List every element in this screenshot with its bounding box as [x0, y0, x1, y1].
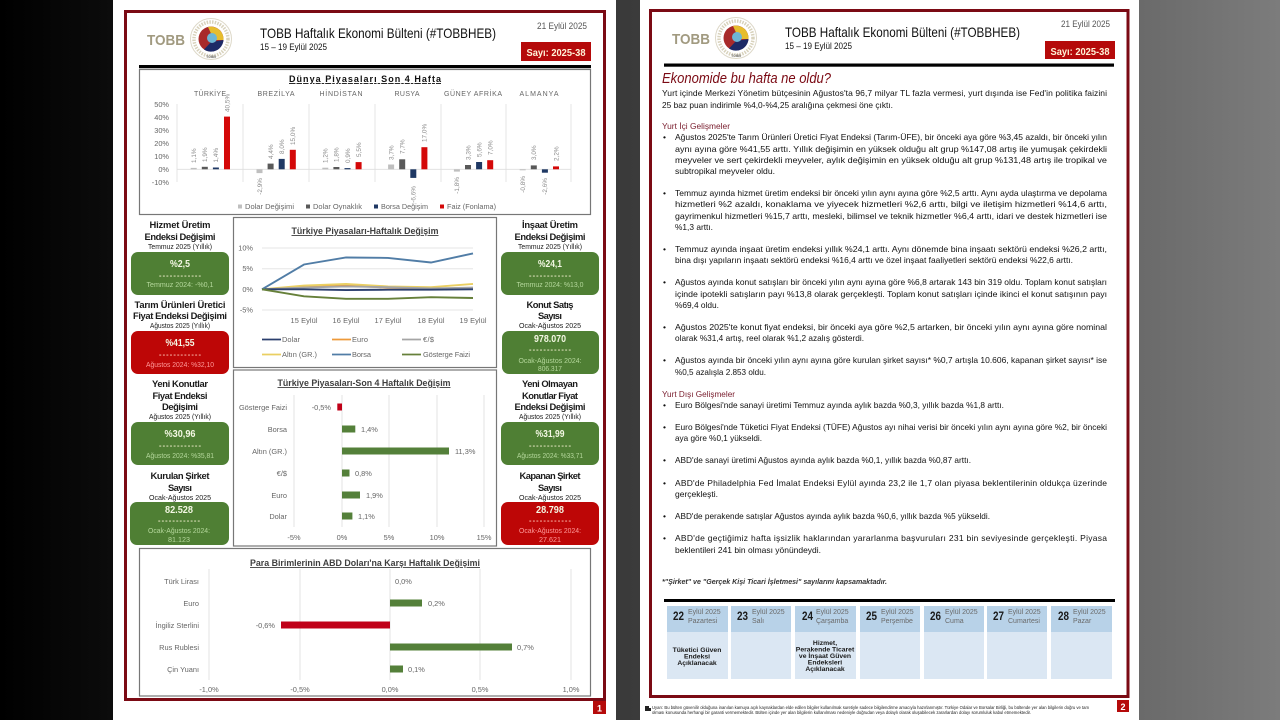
KPI: agricultural producer price: ------------ — [159, 350, 202, 359]
country labels — [194, 89, 559, 98]
KPI: construction production: %24,1 — [538, 258, 562, 270]
KPI: agricultural producer price: Ağustos 2025 (Yıllık) — [150, 321, 210, 330]
y axis: 40% — [154, 113, 169, 122]
KPI: construction production: Endeksi Değişimi — [514, 231, 586, 242]
bullet: housing sales — [663, 277, 1107, 310]
bar value labels: 3,7% — [388, 145, 395, 160]
KPI: existing home prices: Konutlar Fiyat — [522, 390, 578, 401]
legend: Gösterge Faizi — [423, 350, 470, 359]
axis and grid: 5% — [242, 264, 253, 273]
calendar day 28 — [1051, 606, 1112, 679]
x axis: 15% — [477, 533, 492, 542]
bullet: Philadelphia Fed: gerçekleşti. — [675, 489, 718, 499]
value labels: 0,1% — [408, 665, 425, 674]
row labels: Euro — [183, 599, 199, 608]
bullet: US retail: • — [663, 511, 666, 521]
calendar day 23: Eylül 2025 — [752, 609, 785, 616]
calendar day 24: Endeksleri — [808, 660, 842, 666]
bar value labels: 15,0% — [290, 127, 297, 145]
calendar day 26: Eylül 2025 — [945, 609, 978, 616]
calendar day 27: 27 — [993, 611, 1004, 623]
value labels: 0,7% — [517, 643, 534, 652]
heading: Dünya Piyasaları Son 4 Hafta — [289, 74, 442, 84]
TOBB wordmark: TOBB — [672, 31, 710, 48]
KPI: existing home prices: Ağustos 2025 (Yıllık) — [519, 412, 581, 421]
x axis: 10% — [430, 533, 445, 542]
bar value labels: 8,0% — [279, 139, 286, 154]
disclaimer: olması konusunda herhangi bir garanti vermemektedir. Bülten içinde yer alan bilgilerin kullanılması nedeniyle doğrudan veya dolaylı olarak oluşabilecek zararlardan dolayı sorumluluk kabul etmemektedir. — [652, 710, 1031, 715]
bullet: services: %1,3 arttı. — [675, 222, 713, 232]
page number 1: 1 — [597, 704, 602, 714]
KPI: service production — [131, 219, 229, 295]
intro text — [662, 88, 1107, 110]
bullet: Tarım-ÜFE — [663, 132, 1107, 176]
bullet: construction — [663, 244, 1107, 265]
bullet: Philadelphia Fed: ABD'de Philadelphia Fed İmalat Endeksi Eylül ayında 23,2 ile 1,7 olan piyasa beklentilerinin oldukça üzerinde — [675, 478, 1107, 488]
bullet: euro area CPI — [663, 422, 1107, 443]
bullet: US industry: • — [663, 455, 666, 465]
bar value labels: 1,2% — [323, 148, 330, 163]
bullet: services: hizmetleri %2 azaldı, konaklama ve yiyecek hizmetleri %2,6 arttı, bilgi ve iletişim hizmetleri %14,6 arttı, — [675, 199, 1107, 209]
subheading: Yurt Dışı Gelişmeler — [662, 389, 735, 399]
calendar day 24: Hizmet, — [813, 640, 837, 647]
panel: world markets — [140, 70, 590, 214]
calendar day 22 — [667, 606, 728, 679]
legend: Dolar Değişimi — [245, 202, 294, 211]
KPI: agricultural producer price: Tarım Ürünleri Üretici — [134, 299, 226, 310]
value labels: 0,0% — [395, 577, 412, 586]
page number 2 — [1117, 700, 1129, 712]
axis and grid — [238, 244, 487, 325]
bars — [337, 404, 449, 520]
page 1 red frame — [126, 12, 604, 700]
KPI: existing home prices: Yeni Olmayan — [522, 378, 578, 389]
country labels: TÜRKİYE — [194, 89, 226, 98]
axis and grid: 15 Eylül — [290, 316, 318, 325]
calendar day 26: 26 — [930, 611, 941, 623]
bullet: construction: Temmuz ayında inşaat üretim endeksi yıllık %24,1 arttı. Aynı dönemde bina inşaatı sektörü endeksi %26,2 arttı, — [675, 244, 1107, 254]
x axis: 5% — [384, 533, 395, 542]
KPI: service production: Hizmet Üretim — [150, 219, 210, 230]
axis and grid: 0% — [242, 285, 253, 294]
heading: Türkiye Piyasaları-Haftalık Değişim — [292, 226, 438, 236]
icon: TOBB seal: TOBB — [206, 55, 216, 59]
KPI: new home prices: Değişimi — [162, 401, 198, 412]
value labels: 0,2% — [428, 599, 445, 608]
issue badge: Sayı: 2025-38 — [1050, 47, 1110, 58]
KPI: construction production: Temmuz 2024: %13,0 — [516, 280, 584, 289]
row labels: Gösterge Faizi — [239, 403, 287, 412]
KPI: new home prices: Ağustos 2024: %35,81 — [146, 451, 214, 460]
KPI: founded companies — [130, 470, 229, 545]
icon: warning — [645, 706, 651, 711]
page 2 header — [664, 18, 1115, 67]
legend: Altın (GR.) — [282, 350, 317, 359]
calendar day 25: 25 — [866, 611, 878, 623]
legend: Borsa Değişim — [381, 202, 428, 211]
value labels: 1,4% — [361, 425, 378, 434]
value labels: 1,1% — [358, 512, 375, 521]
KPI: service production: Temmuz 2025 (Yıllık) — [148, 242, 212, 251]
calendar day 27 — [987, 606, 1047, 679]
legend: €/$ — [423, 335, 434, 344]
KPI: agricultural producer price: Fiyat Endeksi Değişimi — [133, 310, 227, 321]
axis and grid: 19 Eylül — [460, 316, 487, 325]
legend: Dolar — [282, 335, 301, 344]
calendar day 22: Eylül 2025 — [688, 609, 721, 616]
KPI: housing sales: 978.070 — [534, 333, 566, 345]
row labels — [155, 577, 199, 674]
bullet: US retail: ABD'de perakende satışlar Ağustos ayında aylık bazda %0,6, yıllık bazda %5 yükseldi. — [675, 511, 990, 521]
x axis: 0,0% — [382, 685, 399, 694]
bullet: euro area CPI: • — [663, 422, 666, 432]
bullet: companies: %0,5 azalışla 2.853 oldu. — [675, 367, 766, 377]
row labels: Çin Yuanı — [167, 665, 199, 674]
icon: TOBB seal — [716, 18, 756, 58]
KPI: construction production: ------------ — [529, 271, 572, 280]
icon: TOBB seal: TOBB — [731, 54, 741, 58]
KPI: housing sales: ------------ — [529, 345, 572, 354]
bar value labels: 3,0% — [531, 145, 538, 160]
calendar day 22: Pazartesi — [688, 618, 718, 625]
bullet: housing sales: Ağustos ayında konut satışları bir önceki yılın aynı ayına göre %6,8 artarak 143 bin 319 oldu. Toplam konut satışları — [675, 277, 1107, 287]
calendar day 25: Eylül 2025 — [881, 609, 914, 616]
calendar day 24: Eylül 2025 — [816, 609, 849, 616]
bar value labels: 40,5% — [224, 94, 231, 112]
disclaimer — [645, 705, 1090, 715]
value labels: -0,5% — [312, 403, 331, 412]
KPI: closed companies: Ocak-Ağustos 2024: — [519, 526, 581, 535]
calendar day 23: 23 — [737, 611, 748, 623]
title: TOBB Haftalık Ekonomi Bülteni (#TOBBHEB) — [260, 25, 496, 41]
bullet: US industry: ABD'de sanayi üretimi Ağustos ayında aylık bazda %0,1, yıllık bazda %0,87 arttı. — [675, 455, 971, 465]
axis and grid: 18 Eylül — [418, 316, 445, 325]
x axis — [287, 533, 492, 542]
date range: 15 – 19 Eylül 2025 — [260, 42, 327, 53]
bullet: companies — [663, 355, 1107, 377]
disclaimer: Uyarı: Bu bülten güvenilir olduğuna inanılan kamuya açık kaynaklardan elde edilen bilgiler kullanılmak suretiyle sadece bilgilendirme amacıyla hazırlanmıştır. Türkiye Odalar ve Borsalar Birliği, bu bültende yer alan bilgilerin doğru ve tam — [652, 705, 1090, 710]
intro text: 25 baz puan indirimle %4,0-%4,25 aralığına çekmesi öne çıktı. — [662, 100, 893, 110]
KPI: new home prices: Yeni Konutlar — [152, 378, 208, 389]
calendar day 23 — [731, 606, 791, 679]
KPI: service production: %2,5 — [170, 258, 190, 270]
KPI: closed companies: 28.798 — [536, 504, 564, 516]
bullet: companies: Ağustos ayında bir önceki yılın aynı ayına göre kurulan şirket sayısı* %0,7 artışla 10.606, kapanan şirket sayısı* ise — [675, 355, 1107, 365]
y axis: 0% — [158, 165, 169, 174]
KPI: housing sales: 806.317 — [538, 364, 562, 373]
KPI: founded companies: ------------ — [158, 516, 200, 525]
issue date: 21 Eylül 2025 — [1061, 19, 1110, 29]
row labels: €/$ — [277, 469, 287, 478]
page 1 header — [139, 18, 591, 68]
bullet: services — [663, 188, 1107, 232]
page 1 — [113, 0, 616, 720]
KPI: housing sales — [502, 299, 599, 374]
legend: Faiz (Fonlama) — [447, 202, 496, 211]
calendar day 24: Perakende Ticaret — [796, 646, 855, 654]
KPI: existing home prices — [501, 378, 599, 465]
country labels: RUSYA — [394, 91, 420, 98]
icon: TOBB seal — [190, 18, 232, 60]
panel: currencies against USD — [140, 548, 590, 696]
axis and grid: 16 Eylül — [332, 316, 360, 325]
KPI: housing sales: Ocak-Ağustos 2024: — [518, 356, 582, 365]
axis and grid: 17 Eylül — [374, 316, 402, 325]
calendar day 22: Tüketici Güven — [673, 647, 721, 654]
bar value labels: 1,9% — [202, 147, 209, 162]
value labels: 1,9% — [366, 491, 383, 500]
issue date: 21 Eylül 2025 — [537, 21, 587, 31]
bullet: housing sales: • — [663, 277, 666, 287]
bars — [281, 600, 512, 672]
bullet: US jobless claims: beklentileri 241 bin olması yönündeydi. — [675, 545, 821, 555]
KPI: founded companies: Sayısı — [168, 482, 192, 493]
bar value labels: 7,0% — [488, 140, 494, 155]
KPI: existing home prices: ------------ — [529, 441, 572, 450]
issue badge — [1045, 41, 1115, 59]
axis and grid: 10% — [238, 244, 253, 252]
bar value labels: -6,6% — [411, 186, 418, 203]
y axis: 30% — [154, 126, 169, 135]
legend — [262, 335, 470, 359]
legend: Euro — [352, 335, 368, 344]
calendar day 23: Salı — [752, 618, 764, 625]
KPI: new home prices — [131, 378, 229, 465]
bullet: Tarım-ÜFE: meyveler ve sert çekirdekli meyveler, aylık değişimin en yüksek olduğu alt grup %131,48 artış ile tropikal ve — [675, 155, 1107, 165]
KPI: agricultural producer price — [131, 299, 229, 374]
bar value labels: 4,4% — [268, 144, 275, 159]
page 2 red frame — [650, 10, 1128, 696]
KPI: service production: ------------ — [159, 271, 202, 280]
calendar day 24: Açıklanacak — [805, 666, 845, 673]
KPI: existing home prices: Ağustos 2024: %33,71 — [517, 451, 583, 460]
bar value labels: 1,1% — [191, 148, 198, 163]
x axis — [199, 685, 580, 694]
row labels: Dolar — [269, 512, 288, 521]
bullet: euro area industry: Euro Bölgesi'nde sanayi üretimi Temmuz ayında aylık bazda %0,3, yıllık bazda %1,8 arttı. — [675, 400, 1004, 410]
KPI: founded companies: 81.123 — [168, 535, 190, 544]
KPI: construction production: Temmuz 2025 (Yıllık) — [518, 242, 582, 251]
KPI: new home prices: Fiyat Endeksi — [152, 390, 208, 401]
intro text: Yurt içinde Merkezi Yönetim bütçesinin Ağustos'ta 96,7 milyar TL fazla vermesi, yurt dışında ise Fed'in politika faizini — [662, 88, 1107, 98]
KPI: closed companies: Kapanan Şirket — [520, 470, 580, 481]
KPI: founded companies: Ocak-Ağustos 2025 — [149, 493, 211, 502]
KPI: existing home prices: %31,99 — [536, 428, 565, 440]
KPI: closed companies: ------------ — [529, 516, 572, 525]
calendar day 26: Cuma — [945, 618, 964, 625]
legend: Borsa — [352, 350, 372, 359]
KPI: service production: Endeksi Değişimi — [144, 231, 216, 242]
bullet: Tarım-ÜFE: aynı ayına göre %41,55 arttı. Yıllık değişimin en yüksek olduğu alt grup %147,08 artış ile yumuşak çekirdekli — [675, 144, 1107, 154]
bullet: US jobless claims: • — [663, 533, 666, 543]
row labels: Altın (GR.) — [252, 447, 287, 456]
KPI: agricultural producer price: %41,55 — [166, 337, 195, 349]
value labels: -0,6% — [256, 621, 275, 630]
bullet: construction: • — [663, 244, 666, 254]
bar value labels: 1,4% — [213, 148, 220, 162]
x axis: -1,0% — [199, 685, 219, 694]
calendar day 24: Çarşamba — [816, 618, 848, 625]
bullet: Tarım-ÜFE: • — [663, 132, 666, 142]
calendar day 22: Endeksi — [684, 654, 710, 660]
bar value labels — [191, 94, 560, 203]
heading: Para Birimlerinin ABD Doları'na Karşı Haftalık Değişimi — [250, 558, 480, 568]
x axis: 1,0% — [563, 685, 580, 694]
calendar day 28: Eylül 2025 — [1073, 609, 1106, 616]
calendar day 27: Eylül 2025 — [1008, 609, 1041, 616]
date range: 15 – 19 Eylül 2025 — [785, 41, 852, 52]
row labels: İngiliz Sterlini — [155, 621, 199, 630]
bullet: house prices: olarak %31,4 artış, reel olarak %1,2 azalış gösterdi. — [675, 333, 864, 343]
panel: 4 week bar chart — [234, 370, 496, 546]
KPI: construction production — [501, 219, 599, 295]
calendar day 25: Perşembe — [881, 618, 913, 625]
bullet: house prices: • — [663, 322, 666, 332]
bar value labels: 5,5% — [356, 142, 363, 157]
panel: weekly line chart — [234, 218, 496, 368]
issue badge: Sayı: 2025-38 — [526, 48, 586, 59]
y axis: -10% — [152, 178, 169, 187]
bullet: euro area CPI: Euro Bölgesi'nde Tüketici Fiyat Endeksi (TÜFE) Ağustos ayı nihai verisi bir önceki yılın aynı ayına göre %2, bir önceki — [675, 422, 1107, 432]
axis and grid: -5% — [240, 306, 253, 314]
bar value labels: -2,9% — [257, 178, 264, 195]
section: domestic developments — [662, 121, 1107, 377]
calendar day 28: 28 — [1058, 611, 1070, 623]
calendar day 28: Pazar — [1073, 618, 1092, 625]
bar value labels: -0,8% — [520, 176, 527, 193]
calendar day 22: Açıklanacak — [677, 660, 717, 667]
value labels: 11,3% — [455, 447, 476, 456]
heading: Türkiye Piyasaları-Son 4 Haftalık Değişim — [278, 378, 450, 388]
bar value labels: 7,7% — [400, 139, 406, 154]
page 2 — [640, 0, 1139, 720]
calendar day 22: 22 — [673, 611, 684, 623]
calendar day 24 — [795, 606, 856, 679]
KPI: founded companies: Kurulan Şirket — [150, 470, 210, 481]
KPI: new home prices: Ağustos 2025 (Yıllık) — [149, 412, 211, 421]
bullet: services: • — [663, 188, 666, 198]
KPI: founded companies: 82.528 — [165, 504, 193, 516]
page number 1 — [593, 701, 606, 714]
y axis — [152, 100, 169, 187]
bullet: US jobless claims: ABD'de geçtiğimiz hafta işsizlik haklarından yararlanma başvuruları 231 bin seviyesinde gerçekleşti. Piyasa — [675, 533, 1107, 543]
x axis: -5% — [287, 533, 301, 542]
value labels — [312, 403, 476, 521]
row labels: Borsa — [268, 425, 288, 434]
section: foreign developments — [662, 389, 1107, 555]
x axis: 0% — [337, 533, 348, 542]
footnote: *"Şirket" ve "Gerçek Kişi Ticari İşletmesi" sayılarını kapsamaktadır. — [662, 577, 887, 586]
bullet: Tarım-ÜFE: subtropikal meyveler oldu. — [675, 166, 775, 176]
value labels: 0,8% — [355, 469, 372, 478]
page number 2: 2 — [1120, 702, 1126, 712]
bullet: Tarım-ÜFE: Ağustos 2025'te Tarım Ürünleri Üretici Fiyat Endeksi (Tarım-ÜFE), bir önceki aya göre %3,45 azaldı, bir önceki yılın — [675, 132, 1107, 142]
calendar day 25 — [860, 606, 920, 679]
bullet: services: gayrimenkul hizmetleri %15,7 arttı, mesleki, bilimsel ve teknik hizmetler %6,4 arttı, idari ve destek hizmetleri ise — [675, 211, 1107, 221]
KPI: housing sales: Ocak-Ağustos 2025 — [519, 321, 581, 330]
KPI: existing home prices: Endeksi Değişimi — [514, 401, 586, 412]
legend: Dolar Oynaklık — [313, 202, 362, 211]
KPI: new home prices: ------------ — [159, 441, 202, 450]
y axis: 20% — [154, 139, 169, 148]
bar value labels: 0,9% — [345, 148, 352, 163]
calendar — [667, 606, 1112, 679]
bar value labels: 3,3% — [465, 145, 472, 160]
y axis: 10% — [154, 152, 169, 161]
KPI: construction production: İnşaat Üretim — [522, 219, 578, 230]
country labels: ALMANYA — [520, 91, 559, 98]
calendar day 24: ve İnşaat Güven — [799, 652, 851, 660]
KPI: service production: Temmuz 2024: -%0,1 — [146, 280, 214, 289]
subheading: Yurt İçi Gelişmeler — [662, 121, 730, 131]
calendar day 24: 24 — [802, 611, 814, 623]
KPI: housing sales: Sayısı — [538, 310, 562, 321]
value labels — [256, 577, 534, 674]
bullet: house prices: Ağustos 2025'te konut fiyat endeksi, bir önceki aya göre %2,5 artarken, bir önceki yılın aynı ayına göre nominal — [675, 322, 1107, 332]
bar value labels: 17,0% — [422, 124, 429, 142]
bullet: US jobless claims — [663, 533, 1107, 555]
KPI: closed companies: 27.621 — [539, 535, 561, 544]
row labels: Türk Lirası — [164, 577, 199, 586]
calendar day 26 — [924, 606, 984, 679]
title: TOBB Haftalık Ekonomi Bülteni (#TOBBHEB) — [785, 24, 1020, 40]
bullet: house prices — [663, 322, 1107, 343]
KPI: agricultural producer price: Ağustos 2024: %32,10 — [146, 360, 214, 369]
bar value labels: -2,6% — [542, 178, 549, 195]
bar value labels: -1,8% — [454, 177, 461, 194]
x axis: -0,5% — [290, 685, 310, 694]
KPI: founded companies: Ocak-Ağustos 2024: — [148, 526, 210, 535]
bullet: services: Temmuz ayında hizmet üretim endeksi bir önceki yılın aynı ayına göre %2,5 arttı. Aynı ayda ulaştırma ve depolama — [675, 188, 1107, 198]
bullet: construction: bina dışı yapıların inşaatı sektörü endeksi %16,4 arttı ve özel inşaat faaliyetleri sektörü endeksi %22,6 arttı. — [675, 255, 1073, 265]
row labels: Euro — [271, 491, 287, 500]
TOBB wordmark: TOBB — [147, 32, 185, 49]
KPI: housing sales: Konut Satış — [526, 299, 574, 310]
KPI: closed companies: Sayısı — [538, 482, 562, 493]
bullet: housing sales: %69,4 oldu. — [675, 300, 719, 310]
KPI: closed companies — [501, 470, 599, 545]
legend — [238, 202, 496, 211]
KPI: new home prices: %30,96 — [164, 428, 196, 440]
y axis: 50% — [154, 100, 169, 109]
country labels: GÜNEY AFRİKA — [444, 89, 502, 98]
x axis: 0,5% — [472, 685, 489, 694]
line chart — [262, 253, 473, 299]
bullet: Philadelphia Fed: • — [663, 478, 666, 488]
row labels — [239, 403, 288, 521]
KPI: closed companies: Ocak-Ağustos 2025 — [519, 493, 581, 502]
bar value labels: 2,2% — [553, 146, 560, 161]
bullet: Philadelphia Fed — [663, 478, 1107, 499]
row labels: Rus Rublesi — [159, 643, 199, 652]
bullet: companies: • — [663, 355, 666, 365]
country labels: BREZİLYA — [258, 89, 295, 98]
bar chart: 4 week country bars — [191, 117, 559, 178]
heading: what happened: Ekonomide bu hafta ne oldu? — [662, 70, 832, 87]
bar value labels: 1,8% — [334, 147, 341, 162]
bullet: euro area CPI: aya göre %0,1 yükseldi. — [675, 433, 762, 443]
bullet: housing sales: içinde ipotekli satışların payı %13,8 olarak gerçekleşti. Toplam konut satışları içinde ikinci el konut satışının payı — [675, 289, 1107, 299]
bullet: euro area industry: • — [663, 400, 666, 410]
issue badge — [521, 42, 591, 61]
calendar day 27: Cumartesi — [1008, 618, 1040, 625]
country labels: HİNDİSTAN — [320, 89, 362, 98]
bar value labels: 5,6% — [476, 142, 483, 157]
